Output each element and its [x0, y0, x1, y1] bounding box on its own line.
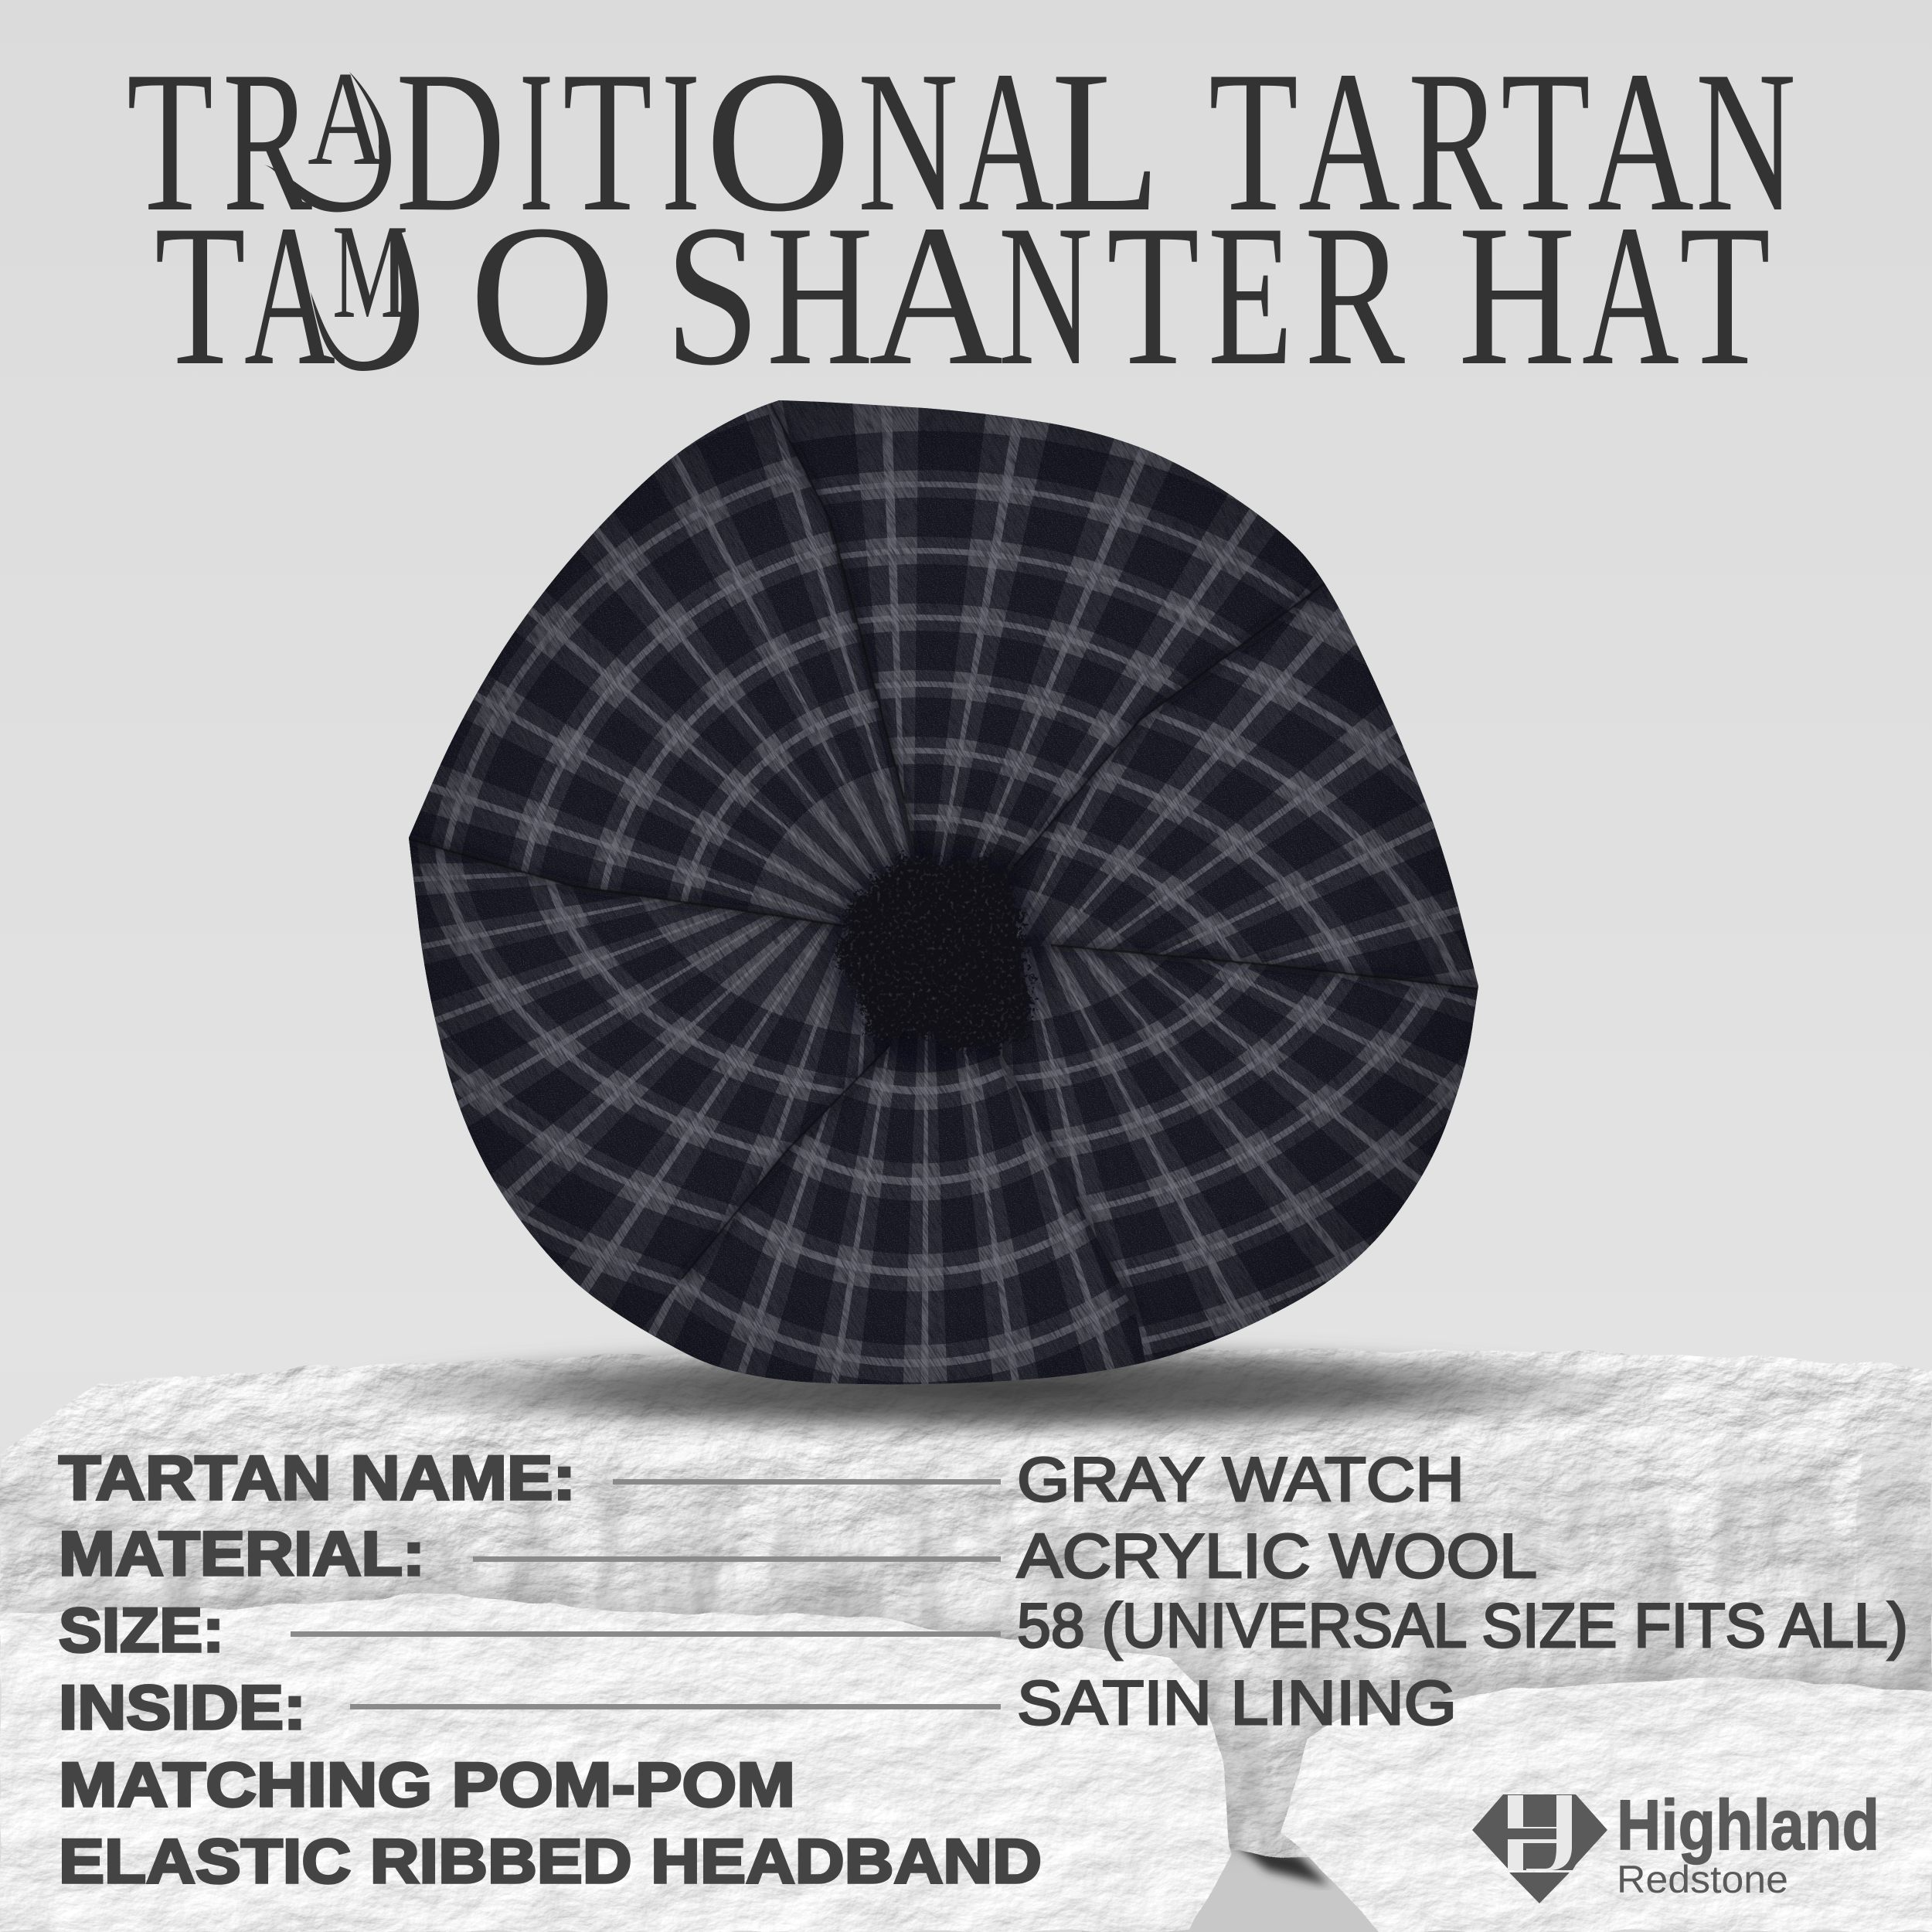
logo: Highland Redstone: [1472, 1786, 1879, 1903]
title line 1: A: [1587, 29, 1694, 253]
spec: material: [59, 1519, 1537, 1591]
title line 1: I: [519, 29, 553, 253]
title line 1: T: [1209, 29, 1298, 253]
title: [127, 29, 1796, 407]
title line 2: T: [1107, 183, 1199, 407]
spec: tartan name: [59, 1444, 1464, 1515]
panel: bottom: [241, 0, 1614, 1634]
panel: lower right: [149, 162, 1860, 1554]
panel seams: [409, 405, 1477, 1314]
title line 2: S: [665, 183, 760, 407]
title line 2: T: [1679, 183, 1770, 407]
title line 2: H: [767, 183, 873, 407]
spec: tartan name: TARTAN NAME:: [59, 1444, 576, 1513]
spec: inside: SATIN LINING: [1017, 1668, 1457, 1738]
title swash under A: [264, 72, 391, 212]
title line 2: N: [998, 183, 1093, 407]
panel: right: [0, 288, 1926, 1814]
title swash under M: [311, 229, 419, 371]
title line 2: A: [1582, 183, 1679, 407]
spec: material: MATERIAL:: [59, 1519, 425, 1589]
rock: back slab: [0, 1348, 1932, 1858]
spec: inside: [59, 1668, 1457, 1743]
title line 2: R: [1304, 183, 1406, 407]
title line 2: E: [1208, 183, 1293, 407]
title line 1: R: [1408, 29, 1503, 253]
spec: inside: INSIDE:: [59, 1673, 306, 1743]
title line 1: A: [308, 43, 385, 193]
spec: material: ACRYLIC WOOL: [1017, 1522, 1537, 1591]
title line 2: A: [869, 183, 1003, 407]
icon: logo diamond: [1472, 1794, 1607, 1903]
panel: upper left: [196, 216, 1674, 1693]
rock shadow: cast by front rocks: [0, 1593, 1932, 1852]
logo wordmark: Highland: [1617, 1786, 1879, 1865]
title line 2: O: [469, 183, 616, 407]
spec: size: [59, 1591, 1908, 1665]
title line 1: A: [958, 29, 1054, 253]
logo subtitle: Redstone: [1617, 1858, 1788, 1901]
title line 1: T: [1501, 29, 1590, 253]
feature: matching pom-pom: MATCHING POM-POM: [59, 1750, 795, 1820]
title line 1: I: [662, 29, 700, 253]
title line 2: T: [155, 183, 246, 407]
title line 1: O: [705, 29, 852, 253]
title line 2: M: [332, 196, 408, 346]
title line 1: A: [1298, 29, 1400, 253]
panel: top: [217, 309, 1607, 1658]
feature: elastic ribbed headband: ELASTIC RIBBED HEADBAND: [59, 1827, 1042, 1896]
title line 1: T: [563, 29, 652, 253]
title line 1: D: [396, 29, 505, 253]
hat: [136, 73, 1770, 1889]
rock: front right: [1275, 1669, 1932, 1932]
spec: size: SIZE:: [59, 1596, 224, 1665]
title line 2: H: [1458, 183, 1576, 407]
title line 1: L: [1051, 29, 1161, 253]
title line 1: T: [127, 29, 213, 253]
spec: tartan name: GRAY WATCH: [1017, 1445, 1464, 1515]
floor between rocks: [1082, 1777, 1546, 1932]
spec: size: 58 (UNIVERSAL SIZE FITS ALL): [1017, 1591, 1908, 1661]
title line 2: A: [244, 183, 335, 407]
title line 1: R: [223, 29, 313, 253]
title line 1: N: [858, 29, 958, 253]
title line 1: N: [1696, 29, 1796, 253]
icon: pom-pom: [827, 845, 1051, 1069]
hat shadow on rock: [317, 1337, 1677, 1442]
rock: front left: [0, 1577, 1252, 1932]
